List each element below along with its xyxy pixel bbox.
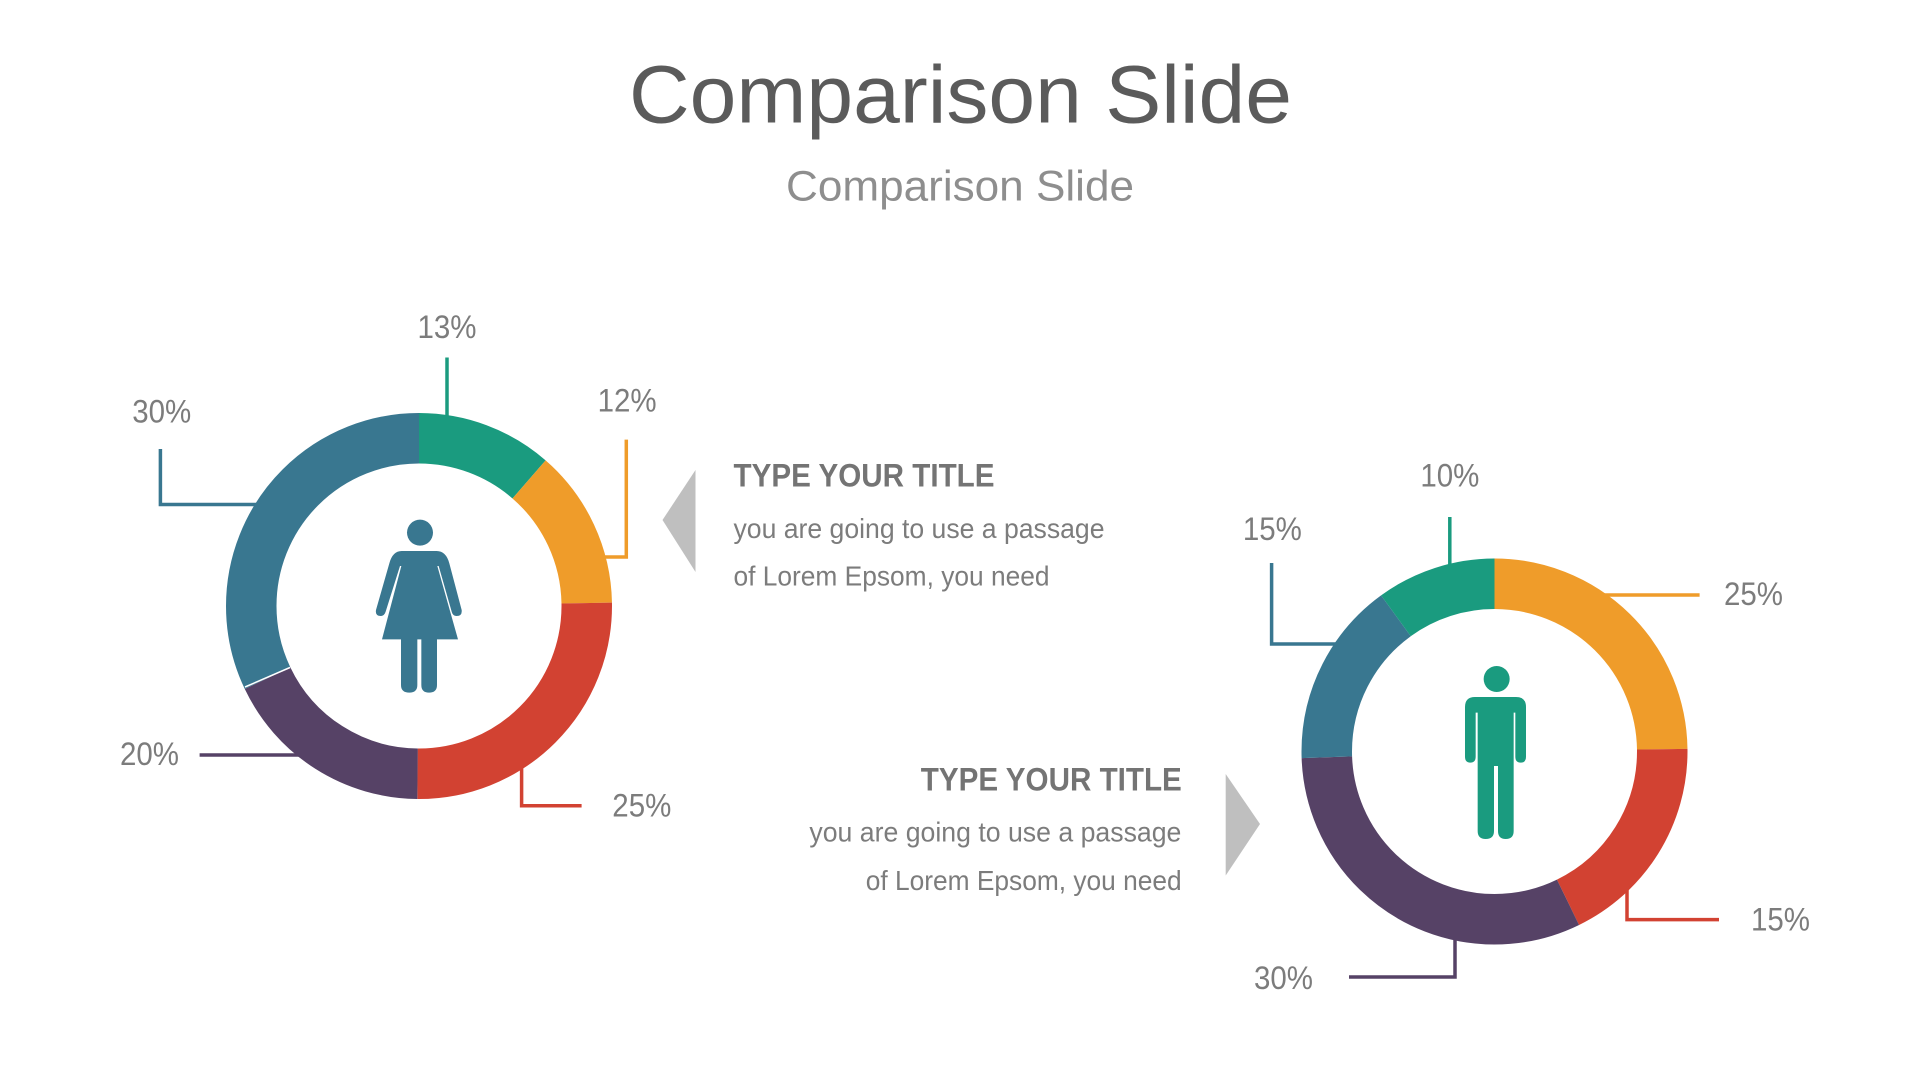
arrow: pointing left [662,470,696,572]
label: 13%: 13% [418,309,476,345]
leader line: 25% [522,760,582,806]
label: 30%: 30% [132,394,191,430]
text block: lower [809,762,1182,896]
leader line: 20% [200,753,305,757]
label: 15% blue: 15% [1243,511,1302,547]
leader line: 30% [1349,935,1455,977]
leader line: 25% [1595,593,1700,597]
label: 10%: 10% [1420,458,1479,494]
leader line: 10% [1448,517,1452,570]
leader line: 15% red [1627,880,1719,920]
donut ring: male [1327,584,1662,919]
label: 12%: 12% [598,383,657,419]
leader line: 15% blue [1272,563,1342,644]
arrow: pointing right [1226,774,1260,876]
label: 25%: 25% [1724,576,1783,612]
text block: upper: you are going to use a passage [734,513,1104,544]
text block: upper: of Lorem Epsom, you need [734,560,1050,592]
panel: male donut chart [1243,458,1810,996]
text block: lower: of Lorem Epsom, you need [866,865,1182,896]
leader line: 30% [160,449,262,504]
label: 20%: 20% [120,736,179,772]
text block: lower: TYPE YOUR TITLE [921,762,1182,798]
text block: lower: you are going to use a passage [809,816,1181,848]
title: Comparison Slide [629,50,1292,140]
donut ring: female [251,438,587,774]
icon: woman [376,520,462,693]
subtitle: Comparison Slide [786,162,1134,210]
label: 25%: 25% [612,788,671,824]
icon: man [1465,666,1526,839]
leader line: 13% [445,358,449,420]
leader line: 12% [600,440,626,557]
panel: female donut chart [120,309,671,824]
text block: upper [734,458,1104,592]
text block: upper: TYPE YOUR TITLE [734,458,994,494]
label: 30%: 30% [1254,960,1313,996]
label: 15% red: 15% [1751,902,1810,938]
